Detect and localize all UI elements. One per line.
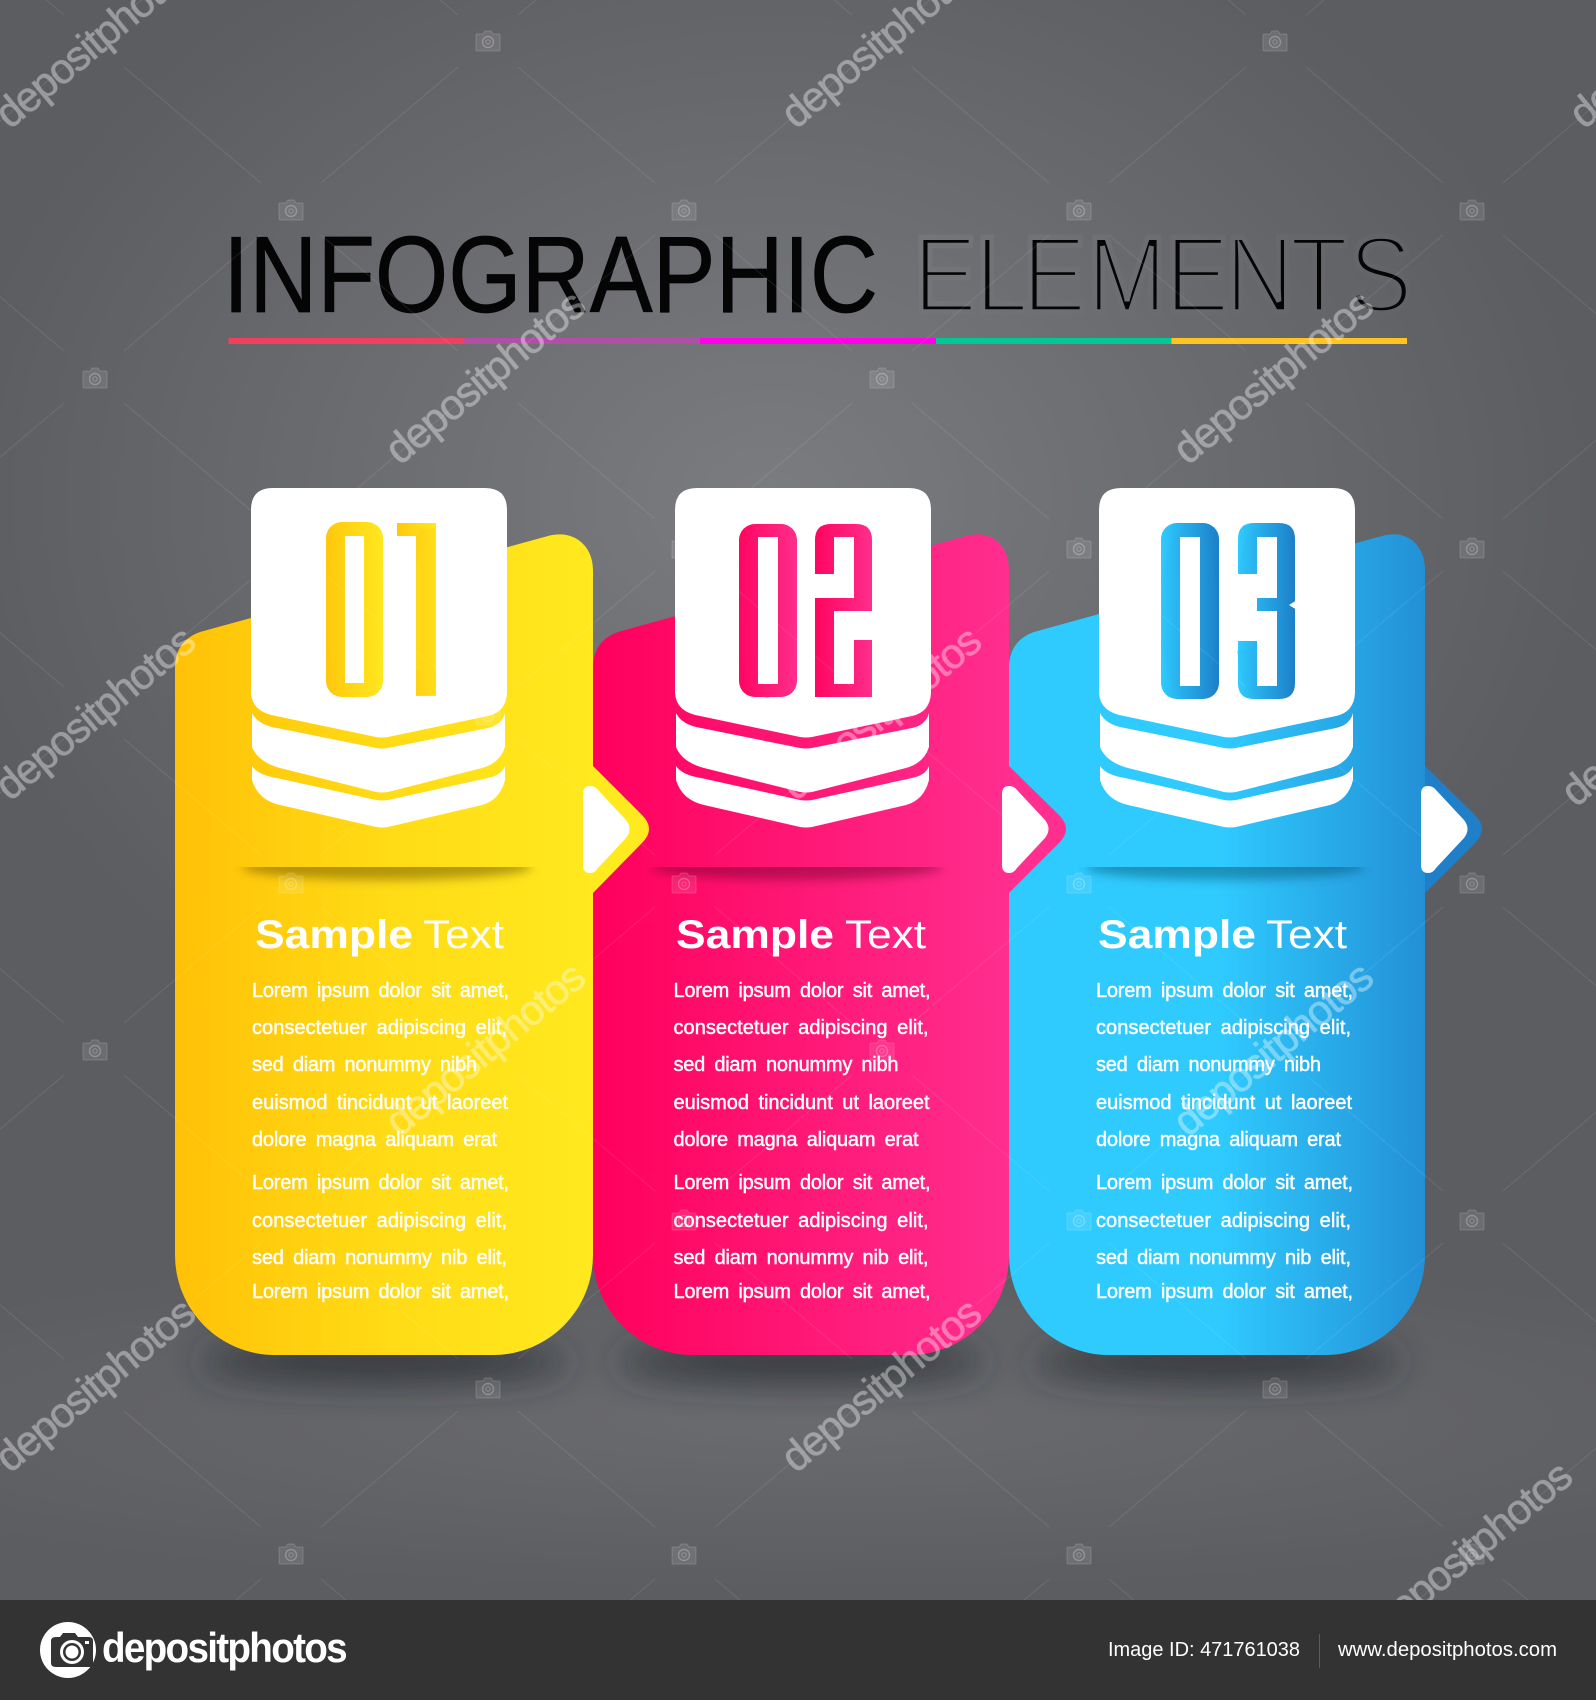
body text: euismod tincidunt ut laoreet bbox=[252, 1092, 508, 1114]
card body bbox=[593, 534, 1009, 1355]
watermark overlay: depositphotos bbox=[772, 616, 990, 809]
title bbox=[223, 213, 1413, 336]
watermark overlay: depositphotos bbox=[1363, 1451, 1581, 1644]
number badge bbox=[1099, 488, 1355, 828]
body text: consectetuer adipiscing elit, bbox=[1096, 1210, 1351, 1232]
card body bbox=[1009, 534, 1425, 1355]
body text: Lorem ipsum dolor sit amet, bbox=[674, 980, 930, 1002]
body text: Lorem ipsum dolor sit amet, bbox=[252, 980, 509, 1002]
body text: euismod tincidunt ut laoreet bbox=[674, 1092, 930, 1114]
heading: Text bbox=[845, 913, 926, 957]
heading: Text bbox=[423, 913, 504, 957]
watermark overlay: depositphotos bbox=[376, 952, 594, 1145]
number badge bbox=[251, 488, 507, 828]
body text: dolore magna aliquam erat bbox=[252, 1129, 497, 1151]
body text bbox=[674, 980, 930, 1303]
heading: Sample bbox=[255, 913, 413, 957]
body text: Lorem ipsum dolor sit amet, bbox=[1096, 1172, 1353, 1194]
title: INFOGRAPHIC bbox=[223, 214, 878, 336]
number badge bbox=[675, 488, 931, 828]
logo wordmark: depositphotos bbox=[102, 1623, 348, 1671]
white arrow bbox=[1421, 786, 1468, 873]
body text: sed diam nonummy nibh bbox=[674, 1054, 898, 1076]
heading: Sample bbox=[1098, 913, 1256, 957]
panel: card 02 pink bbox=[593, 476, 1066, 1355]
white arrow bbox=[1002, 786, 1048, 873]
title underline colour bar bbox=[228, 338, 1407, 344]
icon: logo camera bbox=[40, 1622, 97, 1678]
card floor shadows bbox=[199, 1342, 1402, 1382]
body text bbox=[1096, 980, 1353, 1303]
body text: sed diam nonummy nib elit, bbox=[1096, 1247, 1351, 1269]
number 01 bbox=[322, 476, 460, 747]
white arrow bbox=[583, 786, 630, 873]
watermark overlay: depositphotos bbox=[1164, 952, 1382, 1145]
body text: Lorem ipsum dolor sit amet, bbox=[252, 1172, 509, 1194]
divider shadow bbox=[1082, 867, 1366, 886]
number 02: 0 bbox=[736, 477, 799, 747]
body text: dolore magna aliquam erat bbox=[1096, 1129, 1341, 1151]
number 03: 0 bbox=[1158, 478, 1221, 748]
watermark overlay: depositphotos bbox=[772, 1288, 990, 1481]
heading: Text bbox=[1266, 913, 1347, 957]
divider shadow bbox=[650, 867, 944, 886]
title: ELEMENTS bbox=[913, 213, 1413, 335]
divider shadow bbox=[240, 867, 534, 886]
body text: sed diam nonummy nib elit, bbox=[674, 1247, 928, 1269]
number 01: 0 bbox=[322, 477, 386, 747]
body text: consectetuer adipiscing elit, bbox=[252, 1017, 507, 1039]
number 01: 1 bbox=[396, 476, 454, 747]
body text: dolore magna aliquam erat bbox=[674, 1129, 919, 1151]
watermark overlay: depositphotos bbox=[1164, 280, 1382, 473]
panel: card 01 yellow bbox=[175, 476, 649, 1355]
body text: sed diam nonummy nibh bbox=[252, 1054, 477, 1076]
body text: Lorem ipsum dolor sit amet, bbox=[1096, 980, 1353, 1002]
footer bar bbox=[0, 1600, 1596, 1700]
body text: sed diam nonummy nibh bbox=[1096, 1054, 1321, 1076]
body text: sed diam nonummy nib elit, bbox=[252, 1247, 507, 1269]
body text: consectetuer adipiscing elit, bbox=[1096, 1017, 1351, 1039]
number 02: 2 bbox=[813, 476, 874, 746]
body text: Lorem ipsum dolor sit amet, bbox=[1096, 1281, 1353, 1303]
number 02 bbox=[736, 476, 874, 747]
watermark overlay: depositphotos bbox=[376, 280, 594, 473]
arrow tab bbox=[593, 766, 649, 893]
arrow tab bbox=[1009, 766, 1066, 893]
body text: Lorem ipsum dolor sit amet, bbox=[674, 1172, 930, 1194]
image id: Image ID: 471761038 bbox=[1108, 1639, 1300, 1661]
body text: consectetuer adipiscing elit, bbox=[674, 1017, 928, 1039]
card body bbox=[175, 534, 593, 1355]
heading: Sample bbox=[676, 913, 834, 957]
arrow tab bbox=[1425, 766, 1482, 893]
body text: consectetuer adipiscing elit, bbox=[674, 1210, 928, 1232]
body text: consectetuer adipiscing elit, bbox=[252, 1210, 507, 1232]
body text bbox=[252, 980, 509, 1303]
body text: euismod tincidunt ut laoreet bbox=[1096, 1092, 1352, 1114]
body text: Lorem ipsum dolor sit amet, bbox=[252, 1281, 509, 1303]
panel: card 03 blue bbox=[1009, 477, 1482, 1355]
number 03: 3 bbox=[1235, 477, 1296, 747]
website: www.depositphotos.com bbox=[1337, 1639, 1557, 1661]
body text: Lorem ipsum dolor sit amet, bbox=[674, 1281, 930, 1303]
number 03 bbox=[1158, 477, 1297, 748]
